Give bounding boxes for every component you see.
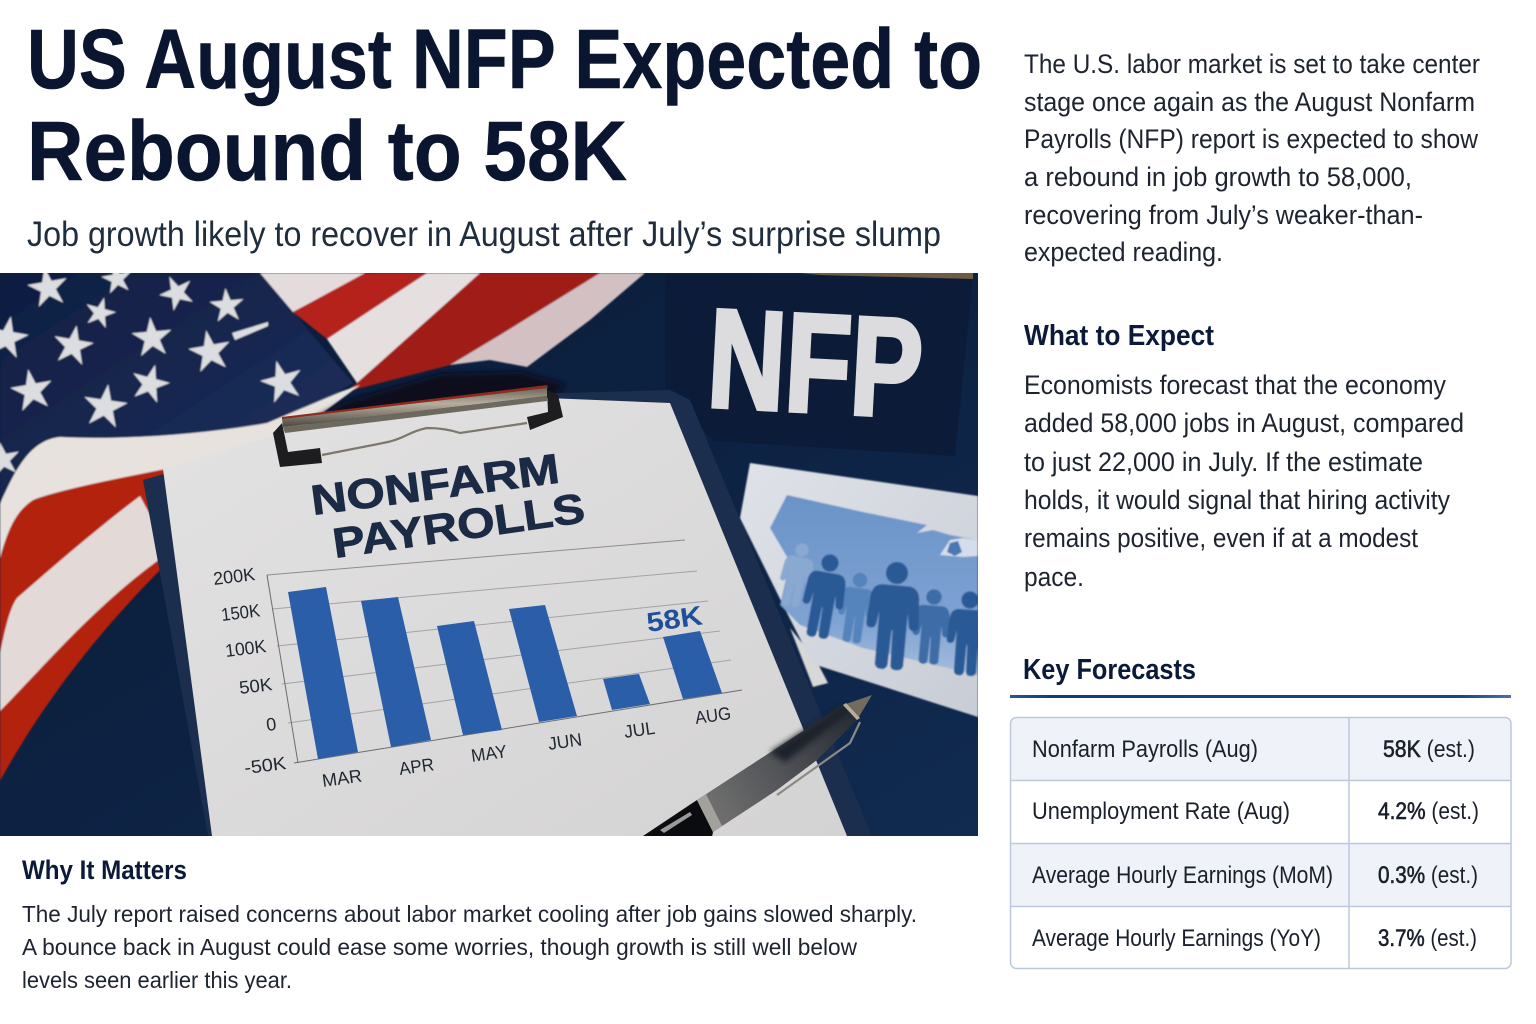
58k chart callout: 58K <box>645 600 705 638</box>
row: average hourly earnings yoy: Average Hourly Earnings (YoY) <box>1032 925 1321 952</box>
row: nonfarm payrolls: 58K (est.) <box>1383 736 1475 763</box>
axis labels <box>212 564 732 791</box>
what to expect paragraph: holds, it would signal that hiring activity <box>1024 485 1451 515</box>
axis labels: AUG <box>694 703 732 728</box>
what to expect heading: What to Expect <box>1024 320 1214 352</box>
row: average hourly earnings yoy: 3.7% (est.) <box>1378 925 1477 952</box>
title: US August NFP Expected to <box>27 12 982 106</box>
intro paragraph: Payrolls (NFP) report is expected to show <box>1024 124 1479 154</box>
axis labels: APR <box>398 754 435 779</box>
intro paragraph: The U.S. labor market is set to take center <box>1024 49 1480 79</box>
nonfarm payrolls heading: PAYROLLS <box>330 484 588 567</box>
map and workers card <box>740 463 991 717</box>
hero photo: flag, clipboard chart, NFP sign <box>0 261 991 837</box>
intro paragraph: recovering from July’s weaker-than- <box>1024 200 1423 230</box>
axis labels: 200K <box>212 564 256 589</box>
axis labels: 0 <box>265 714 277 735</box>
key forecasts heading <box>1010 654 1511 698</box>
what to expect paragraph: pace. <box>1024 562 1084 592</box>
what to expect paragraph: to just 22,000 in July. If the estimate <box>1024 447 1423 477</box>
row: unemployment rate: Unemployment Rate (Aug) <box>1032 798 1290 825</box>
why it matters paragraph <box>22 901 917 993</box>
what to expect paragraph <box>1024 370 1464 592</box>
why it matters paragraph: The July report raised concerns about labor market cooling after job gains slowed sharply. <box>22 901 917 927</box>
key forecasts heading: Key Forecasts <box>1023 654 1196 686</box>
american flag <box>0 261 645 781</box>
row: average hourly earnings mom: 0.3% (est.) <box>1378 862 1478 889</box>
key forecasts table <box>1010 717 1512 969</box>
intro paragraph: stage once again as the August Nonfarm <box>1024 87 1475 117</box>
axis labels: JUN <box>547 729 583 754</box>
bar chart <box>212 540 742 791</box>
subtitle: Job growth likely to recover in August after July’s surprise slump <box>27 215 941 254</box>
intro paragraph: a rebound in job growth to 58,000, <box>1024 162 1412 192</box>
row: nonfarm payrolls: Nonfarm Payrolls (Aug) <box>1032 736 1258 763</box>
nonfarm payrolls heading: NONFARM <box>308 445 562 524</box>
row: average hourly earnings mom: Average Hourly Earnings (MoM) <box>1032 862 1333 889</box>
axis labels: 50K <box>238 674 273 698</box>
clipboard <box>143 372 872 836</box>
why it matters paragraph: levels seen earlier this year. <box>22 967 292 993</box>
pen <box>643 695 872 837</box>
axis labels: JUL <box>623 718 656 742</box>
intro paragraph <box>1024 49 1480 267</box>
why it matters heading: Why It Matters <box>22 855 187 885</box>
what to expect paragraph: Economists forecast that the economy <box>1024 370 1447 400</box>
row: unemployment rate <box>1032 798 1479 825</box>
nfp sign: NFP <box>704 279 926 447</box>
axis labels: 150K <box>220 600 261 625</box>
title: Rebound to 58K <box>27 104 627 198</box>
intro paragraph: expected reading. <box>1024 237 1223 267</box>
title <box>27 12 982 198</box>
axis labels: -50K <box>243 753 287 778</box>
what to expect paragraph: remains positive, even if at a modest <box>1024 523 1419 553</box>
axis labels: MAY <box>470 741 508 766</box>
what to expect paragraph: added 58,000 jobs in August, compared <box>1024 408 1464 438</box>
row: nonfarm payrolls <box>1032 736 1475 763</box>
clipboard clip <box>273 385 563 467</box>
why it matters paragraph: A bounce back in August could ease some worries, though growth is still well below <box>22 934 858 960</box>
row: unemployment rate: 4.2% (est.) <box>1378 798 1479 825</box>
nonfarm payrolls heading <box>312 454 584 558</box>
axis labels: 100K <box>224 636 267 661</box>
axis labels: MAR <box>321 766 363 791</box>
